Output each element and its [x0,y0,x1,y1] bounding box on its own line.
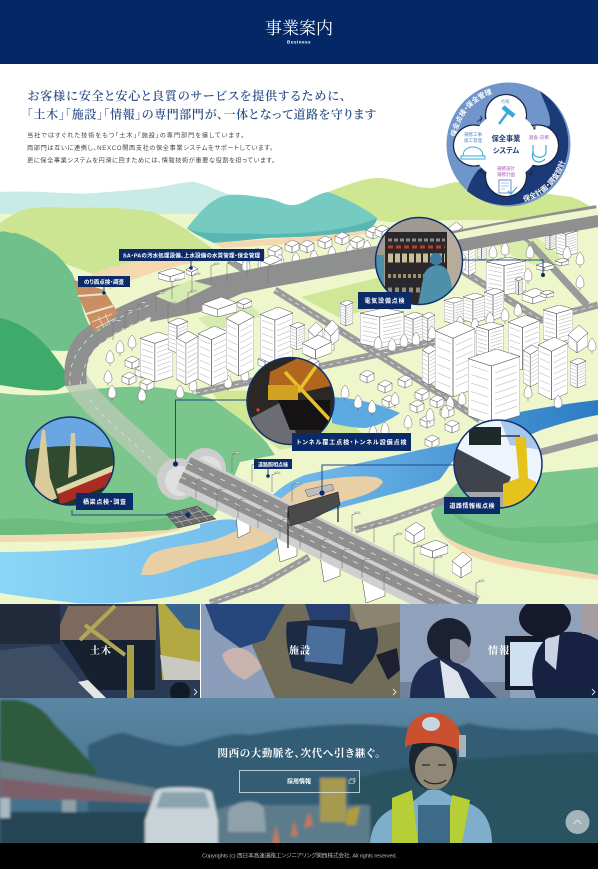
step: repair planning: 補修計画 [497,171,515,178]
photo: tunnel inspection [247,357,335,445]
landscape map [0,178,598,618]
recruit hero photo [0,695,598,845]
scroll to top button [566,810,590,834]
tile caption: 情報 [488,644,510,657]
tile caption: 施設 [289,644,311,657]
silver car [228,802,266,832]
upper viaduct road [70,214,598,475]
tile: facilities [201,604,400,698]
diagram centre label [492,134,520,155]
subtitle: Business [287,40,311,44]
label: road lighting [254,459,292,469]
intro heading: お客様に安全と安心と良質のサービスを提供するために、 [27,88,346,103]
intro heading: 「土木」「施設」「情報」の専門部門が、一体となって道路を守ります [27,106,376,122]
label: slope: のり面点検・調査 [84,278,124,286]
label: SA-PA water facility [119,249,264,261]
road sign gantry [288,484,340,548]
chevron [592,689,595,695]
hero tagline: 関西の大動脈を、次代へ引き継ぐ。 [218,746,380,760]
street lights [196,452,484,600]
diagram centre label: システム [493,146,519,155]
label: road information board [444,497,500,514]
chevron [194,689,197,695]
drainage grid [166,506,216,528]
footer: Copyrights (c) 西日本高速道路エンジニアリング関西株式会社. All rights reserved. [202,852,397,860]
houses near river [405,522,472,578]
tile: information [400,598,598,698]
service area [113,258,290,340]
step: repair planning: 補修設計 [497,165,515,172]
label: bridge: 橋梁点検・調査 [83,498,126,506]
rivers [0,397,598,604]
recruit button: 採用情報 [287,778,311,786]
label: electrical: 電気設備点検 [364,297,404,305]
footer [0,843,598,869]
maintenance system diagram [446,82,570,206]
sand bar [141,476,383,575]
intro body text: 両部門は互いに連携し、NEXCO関西支社の保全事業システムをサポートしています。 [27,144,273,152]
step: repair planning [497,165,517,194]
city buildings and trees [104,288,596,448]
photo: road information board inspection [454,420,542,508]
diagram centre label: 保全事業 [492,134,520,143]
label: slope [78,276,130,287]
ground roads [196,243,598,603]
intro body text: 当社ではすぐれた技術をもつ「土木」「施設」の専門部門を擁しています。 [27,132,244,140]
label: tunnel [292,433,411,451]
label: electrical [358,292,411,309]
intro body text [27,132,275,164]
construction truck [320,778,346,822]
label: bridge [76,493,133,510]
distant hills [0,178,598,604]
interchange ramp [497,215,598,243]
cycle arrows [477,116,535,175]
photo: bridge inspection [26,417,114,505]
step: inspection: 点検 [500,98,510,105]
label: SA-PA water facility: SA・PAの汚水処理設備、上水設備の水質管理・保全管理 [123,252,260,260]
intro heading [27,88,376,122]
overpass [0,761,155,800]
slope [74,280,118,333]
tile: civil engineering [0,604,200,702]
left forest hills [0,231,95,391]
step: repair work [461,131,485,159]
worker [370,790,492,843]
white van [145,787,218,845]
road [216,804,372,843]
arc caption: planning and survey: 保全計画・調査設計 [523,160,565,202]
label: road information board: 道路情報板点検 [450,502,494,510]
intro body text: 更に保全事業システムを円滑に回すためには、情報技術が重要な役割を担っています。 [27,156,275,164]
recruit button [240,770,360,792]
tile caption: 土木 [90,644,112,657]
city buildings back row [236,222,584,304]
label: road lighting: 道路照明点検 [258,461,288,468]
bridge piers [236,515,385,603]
connector lines [72,260,545,518]
photo: electrical equipment inspection [375,217,463,310]
step: survey and diagnosis: 調査・診断 [529,134,550,141]
title: 事業案内 [265,19,333,38]
lime field patches [212,225,561,450]
expressway bridge [157,448,484,618]
arc caption: inspection and management: 保全点検・保全管理 [450,88,492,136]
chevron [393,689,396,695]
central cloud shape [454,94,558,196]
header band [0,0,598,64]
step: repair work: 補修工事 [464,131,482,138]
big green hills [0,387,598,580]
mountains [87,722,598,813]
label: tunnel: トンネル覆工点検・トンネル設備点検 [296,438,406,446]
tunnel portals [157,448,226,500]
step: repair work: 施工管理 [464,137,482,144]
